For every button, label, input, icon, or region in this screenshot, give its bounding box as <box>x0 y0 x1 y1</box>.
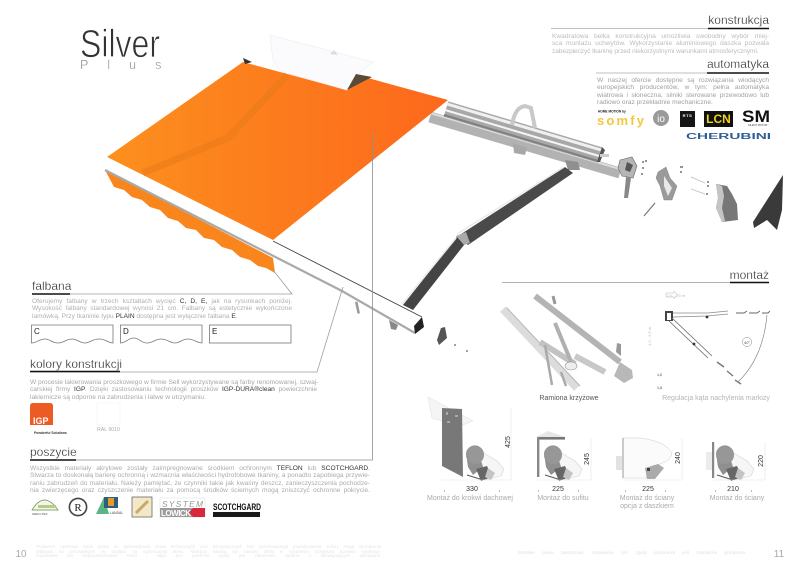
text: konstrukcja: Kwadratowa belka konstrukcyjna umożliwia swobodny wybór miej- <box>552 33 769 40</box>
illustration: folding arm <box>402 167 573 310</box>
logo: RTS: RTS <box>683 113 692 118</box>
text: kolory konstrukcji: lakiernicze są odporne na zabrudzenia i łatwe w utrzymaniu. <box>30 394 206 401</box>
logo: beige label <box>132 497 152 517</box>
diagram: ceiling mounting: 245 <box>584 453 591 465</box>
diagram: arm tilt adjustment: 1,6 <box>657 373 662 377</box>
heading: montaż: montaż <box>730 268 769 282</box>
logo: System Lowick: LOWICK <box>161 509 191 518</box>
text: poszycie: nia zwierzęcego oraz czyszczenie materiału za pomocą środków ściernych mogą zniszczyć ochronne pokrycie. <box>30 487 370 494</box>
logo: IGP: IGP <box>33 416 49 426</box>
logo: System Lowick: SYSTEM <box>162 499 203 509</box>
logo: System Lowick <box>160 498 205 518</box>
caption: ceiling mounting: Montaż do sufitu <box>537 495 589 502</box>
caption: wall mounting with canopy <box>620 494 674 510</box>
caption: crossed arms: Ramiona krzyżowe <box>539 395 599 402</box>
logo: certificate arch <box>32 500 58 516</box>
rule: montaż <box>502 282 769 284</box>
valance shape C <box>32 325 113 343</box>
text: automatyka: radiowo oraz przekładnie mechaniczne. <box>597 99 713 106</box>
text: poszycie: Wszystkie materiały akrylowe zostały zaimpregnowane środkiem ochronnym TEFLON lub SCOTCHGARD. <box>30 465 370 472</box>
illustration: awning fabric with valance <box>105 62 448 273</box>
logo: registered mark <box>69 498 87 516</box>
text: automatyka <box>597 77 769 106</box>
rule: automatyka <box>596 72 769 74</box>
logo: somfy: HOME MOTION by <box>598 110 626 114</box>
text: falbana: Oferujemy falbany w trzech kształtach wycięć C, D, E, jak na rysunkach poniżej. <box>32 298 292 305</box>
text: konstrukcja: zabezpieczyć tkaninę przed niekorzystnymi warunkami atmosferycznymi. <box>552 48 758 55</box>
text: falbana: lamówką. Przy tkaninie typu PLAIN dostępna jest wyłącznie falbana E. <box>32 313 238 320</box>
diagram: ceiling mounting: 225 <box>552 486 564 493</box>
text: konstrukcja: sca montażu uchwytów. Wykorzystanie aluminiowego daszka pozwala <box>552 40 769 47</box>
rule: poszycie underline <box>30 459 76 461</box>
heading: konstrukcja: konstrukcja <box>708 13 769 27</box>
rule: falbana underline <box>32 293 70 295</box>
logo: IGP <box>30 403 67 435</box>
diagram: arm tilt adjustment: 1,8 <box>657 386 662 390</box>
valance shape D: D <box>123 327 129 336</box>
diagram: arm tilt adjustment: 1,5 - 2,5 m <box>666 293 686 298</box>
footer note: left: Kopiowanie lub rozpowszechnianie treści i zdjęć bez pisemnej zgody jest zabronione zgodnie z obowiązującymi przepisami. <box>36 553 381 558</box>
page number: 10: 10 <box>15 549 27 560</box>
logo: registered mark: R <box>74 502 82 514</box>
valance shape E <box>210 325 291 343</box>
heading: kolory konstrukcji: kolory konstrukcji <box>30 357 122 371</box>
leader line: poszycie <box>30 133 372 460</box>
text: kolory konstrukcji: W procesie lakierowania proszkowego w firmie Sell wykorzystywane są farby renomowanej, szwaj- <box>30 379 318 386</box>
subtitle: Plus: Plus <box>80 58 180 72</box>
diagram: arm tilt adjustment <box>647 291 770 390</box>
text: automatyka: europejskich producentów, w tym: pełna automatyka <box>597 84 769 91</box>
page number: 11: 11 <box>774 549 784 560</box>
leader line: kolory konstrukcji <box>30 287 343 372</box>
logo: io: io <box>657 114 665 125</box>
text: poszycie <box>30 465 370 494</box>
caption: wall mounting with canopy: opcja z daszkiem <box>620 503 674 510</box>
text: kolory konstrukcji <box>30 379 318 401</box>
diagram: wall mounting: 210 <box>727 486 739 493</box>
logo: RTS <box>680 111 695 127</box>
valance shape E: E <box>212 327 217 336</box>
title: Silver: Silver <box>80 23 160 66</box>
diagram: wall mounting with canopy: 240 <box>675 452 682 464</box>
logo: Scotchgard: SCOTCHGARD <box>213 502 261 513</box>
caption: wall mounting: Montaż do ściany <box>710 495 764 502</box>
footer note: left: Producent zastrzega sobie prawo do wprowadzania zmian technicznych oraz kolorystycznych bez wcześniejszego powiadomienia. Kolory mogą nieznacznie <box>36 544 381 549</box>
caption: rafter mounting: Montaż do krokwi dachowej <box>427 495 513 502</box>
text: konstrukcja <box>552 33 769 55</box>
diagram: wall mounting with canopy <box>616 438 682 493</box>
rule: konstrukcja <box>551 28 769 30</box>
footer note: right: Wszelkie prawa zastrzeżone. Kopiowanie bez zgody producenta jest zabronione przepisami. <box>518 550 746 555</box>
footer note: left <box>36 544 381 558</box>
text: kolory konstrukcji: carskiej firmy IGP. Dzięki zastosowaniu technologii proszków IGP-DURA®clean powierzchnie <box>30 386 317 393</box>
footer note: left: odbiegać od rzeczywistych ze względu na ograniczenia druku. Niniejszy katalog nie stanowi oferty w rozumieniu przepisów kodeksu cywilnego. <box>36 549 381 554</box>
diagram: arm tilt adjustment: 40° <box>744 340 750 345</box>
illustration: exploded end parts <box>618 157 783 230</box>
text: falbana <box>32 298 292 320</box>
logo: io <box>653 110 669 126</box>
logo: Scotchgard <box>213 502 261 517</box>
caption: tilt adjustment: Regulacja kąta nachylenia markizy <box>662 395 770 402</box>
logo: SM: SM <box>742 107 770 126</box>
text: poszycie: Stwarza to doskonałą barierę ochronną i wzmacnia właściwości hydrofobowe tkaniny, a ponadto zapobiega przywie- <box>30 472 370 479</box>
diagram: rafter mounting: 425 <box>505 436 512 448</box>
illustration: roller tube and lower profile <box>430 104 620 173</box>
logo: Cherubini: CHERUBINI <box>686 132 771 141</box>
text: automatyka: wiatrowa i słoneczna, silniki sterowane przewodowo lub <box>597 92 769 99</box>
diagram: ceiling mounting <box>536 431 591 493</box>
diagram: rafter mounting: 330 <box>466 486 478 493</box>
rule: kolory underline <box>30 370 120 372</box>
logo: certificate arch: OEKO-TEX <box>32 512 48 516</box>
caption: wall mounting with canopy: Montaż do ściany <box>620 495 674 502</box>
illustration: front bar <box>100 157 468 352</box>
logo: green and colour mark <box>96 497 123 515</box>
logo: somfy: somfy <box>597 113 645 128</box>
diagram: crossed arms <box>503 296 633 388</box>
leader line: falbana <box>32 270 292 294</box>
heading: poszycie: poszycie <box>30 445 77 459</box>
illustration: white hood above the cassette <box>243 35 373 90</box>
diagram: wall mounting: 220 <box>758 455 765 467</box>
logo: LCN: LCN <box>706 112 731 126</box>
valance shape D <box>120 325 202 343</box>
diagram: rafter mounting <box>428 397 512 493</box>
swatch: RAL 9010: RAL 9010 <box>97 427 120 433</box>
logo: SM: SILENT MOTOR <box>748 123 767 127</box>
text: automatyka: W naszej ofercie dostępne są rozwiązania wiodących <box>597 77 769 84</box>
heading: automatyka: automatyka <box>707 57 769 71</box>
diagram: wall mounting <box>706 442 765 493</box>
logo: IGP: Powderful Solutions <box>34 431 67 435</box>
swatch: RAL 9010 <box>97 403 120 433</box>
diagram: arm tilt adjustment: 1,5 - 2,5 m <box>647 326 652 346</box>
text: poszycie: raniu zabrudzeń do materiału. Należy pamiętać, że czynniki takie jak kwaśny deszcz, zanieczyszczenia pochodze- <box>30 480 370 487</box>
diagram: wall mounting with canopy: 225 <box>642 486 654 493</box>
valance shape C: C <box>34 327 40 336</box>
text: falbana: Wysokość falbany standardowej wynosi 21 cm. Falbany są estetycznie wykończone <box>32 305 292 312</box>
logo: green and colour mark: LANDAL <box>110 511 123 515</box>
heading: falbana: falbana <box>32 279 71 293</box>
